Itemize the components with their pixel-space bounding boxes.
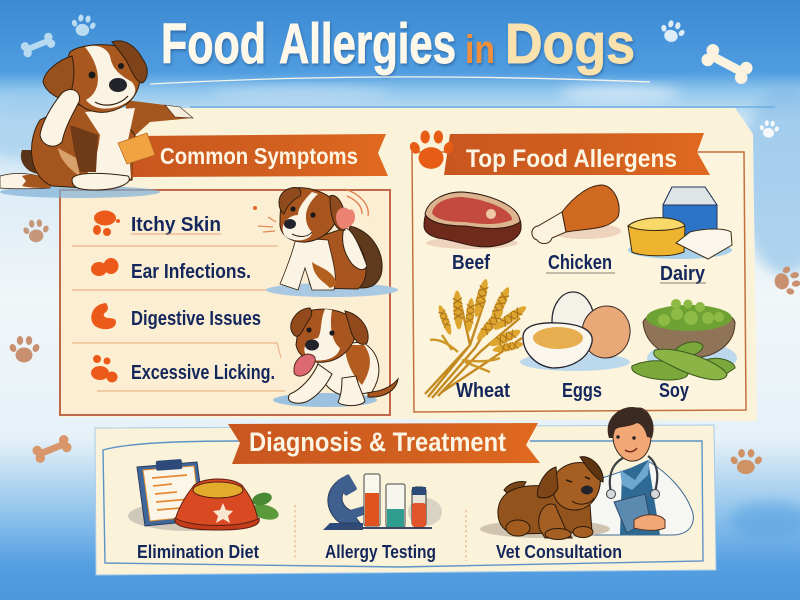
icon: clipboard	[128, 459, 252, 531]
text: allergen labels	[452, 252, 706, 402]
icon: test tubes	[340, 474, 442, 528]
icon: food bowl	[175, 479, 280, 530]
banner: top food allergens	[444, 133, 710, 175]
title: Dogs	[505, 12, 635, 76]
text: symptoms: Digestive Issues	[131, 308, 261, 330]
text: symptoms: Excessive Licking.	[131, 362, 275, 384]
icon: digestive issues	[91, 303, 116, 329]
banner: common symptoms	[132, 134, 388, 177]
banner: top food allergens: Top Food Allergens	[466, 145, 677, 173]
text: symptoms: Itchy Skin	[131, 214, 221, 236]
icon: chicken drumstick	[532, 185, 621, 244]
text: treatment labels: Vet Consultation	[496, 542, 622, 562]
icon: ear infections	[91, 258, 118, 276]
panel: blue top edge	[190, 106, 775, 108]
text: allergen labels: Dairy	[660, 263, 706, 285]
title: Food	[161, 12, 266, 76]
banner: diagnosis and treatment	[228, 423, 540, 464]
text: symptoms: Ear Infections.	[131, 261, 251, 283]
text: symptoms	[131, 214, 275, 384]
panel: top food allergens	[412, 152, 746, 412]
icon: orange tag	[118, 133, 155, 164]
icon: wheat	[425, 278, 529, 398]
decorative: title underline	[150, 77, 650, 84]
text: allergen labels: Chicken	[548, 252, 612, 274]
icon: beef	[424, 192, 521, 249]
icon: soy	[632, 299, 737, 380]
panel: common symptoms	[60, 190, 390, 415]
banner: diagnosis and treatment: Diagnosis & Treatment	[249, 427, 506, 457]
text: allergen labels: Eggs	[562, 380, 602, 402]
icon: itchy skin	[93, 210, 120, 236]
title: in	[465, 28, 495, 72]
text: allergen labels: Beef	[452, 252, 490, 274]
illustration: veterinarian	[588, 407, 693, 535]
panel: diagnosis and treatment	[95, 425, 716, 575]
text: allergen labels: Wheat	[456, 380, 510, 402]
illustration: large scratching dog	[0, 41, 193, 198]
illustration: licking puppy	[273, 308, 398, 407]
icon: eggs	[520, 292, 634, 371]
icon: dairy	[628, 187, 732, 259]
icon: decorative paws and bones	[8, 13, 800, 474]
title	[161, 12, 635, 76]
text: allergen labels: Soy	[659, 380, 690, 402]
text: treatment labels: Allergy Testing	[325, 542, 436, 562]
icon: microscope	[323, 474, 378, 530]
illustration: brown dog at vet	[480, 457, 610, 540]
panel: main cream sheet	[60, 108, 757, 421]
text: treatment labels: Elimination Diet	[137, 542, 259, 562]
text: treatment labels	[137, 542, 622, 562]
banner: common symptoms: Common Symptoms	[160, 143, 358, 169]
icon: orange paw	[408, 130, 456, 169]
icon: excessive licking	[91, 355, 118, 382]
illustration: scratching puppy	[253, 188, 398, 297]
title: Allergies	[279, 12, 456, 76]
